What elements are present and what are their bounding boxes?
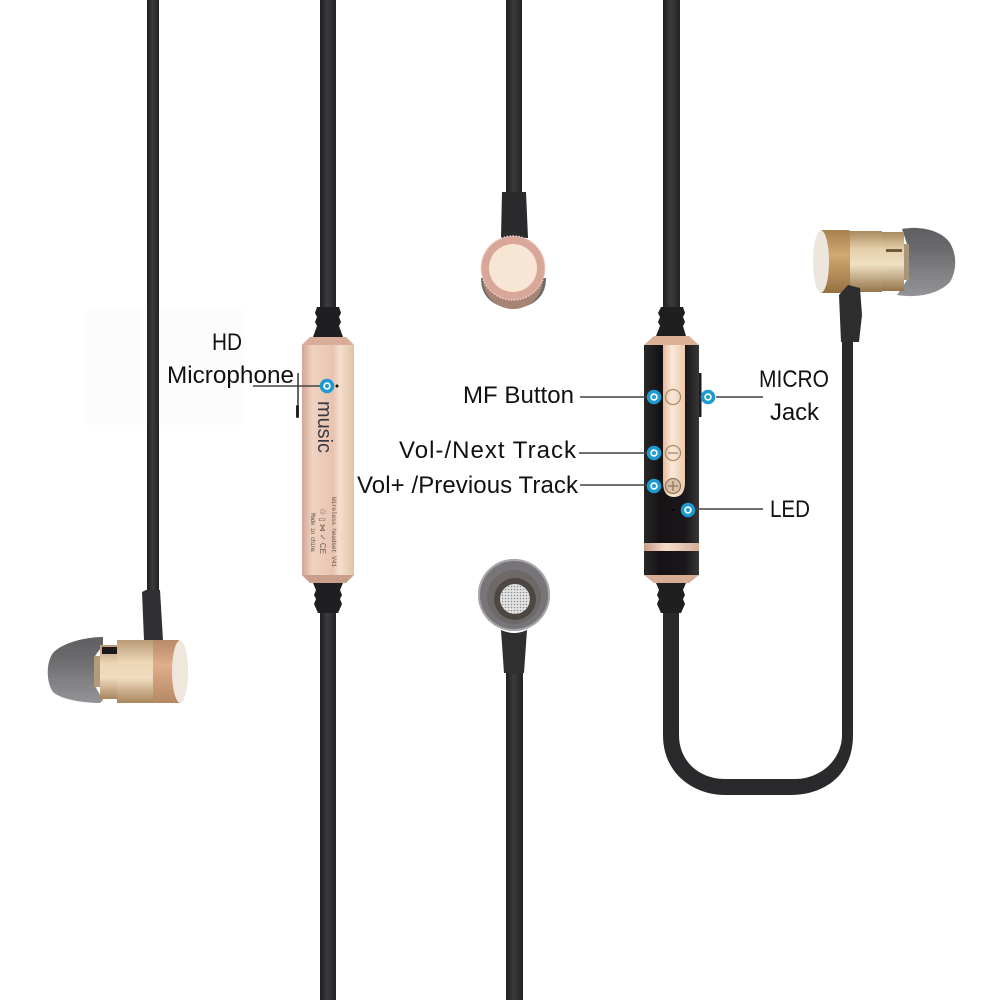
- body: smooth metal: [117, 640, 154, 703]
- callout: Vol-/Next Track: Vol-/Next Track: [399, 437, 577, 464]
- mic hole: [336, 384, 338, 388]
- inner nozzle: [94, 656, 104, 687]
- right cable loop: [663, 340, 853, 795]
- callout: MICRO Jack: Jack: [770, 399, 820, 426]
- body: knurled ring: [153, 640, 180, 703]
- rose caps: [644, 336, 699, 345]
- disc face: [489, 244, 537, 292]
- upper strain relief: [313, 307, 343, 337]
- right earbud: [813, 228, 955, 342]
- collar: [100, 645, 118, 699]
- ear tip: [897, 228, 955, 296]
- lower strain relief: [313, 583, 343, 613]
- LED hole: [672, 509, 674, 511]
- callout: MF Button: [463, 382, 660, 409]
- lower strain relief: [656, 583, 686, 613]
- brand text: music: [313, 401, 335, 453]
- body: face: [172, 640, 188, 702]
- strain relief: [501, 630, 527, 673]
- disc rim: [481, 236, 545, 300]
- leader line: [253, 385, 320, 387]
- collar: [880, 232, 904, 291]
- callout: LED: [682, 496, 810, 523]
- upper strain relief: [656, 307, 686, 336]
- module body: [302, 337, 354, 583]
- label: HD: [212, 329, 242, 356]
- upper cable: [663, 0, 680, 310]
- cable: [506, 673, 523, 1000]
- rear tip: [481, 278, 546, 309]
- body: smooth metal: [849, 231, 882, 292]
- certification marks: ♲ ▯ ⋈ ✓ CE: [318, 508, 327, 554]
- mesh: [500, 584, 530, 614]
- marker: [322, 380, 332, 392]
- body: face: [813, 230, 829, 292]
- cable: [506, 0, 522, 195]
- left cable with module: [296, 0, 354, 1000]
- ear tip: [48, 637, 103, 703]
- rose band: [644, 543, 699, 551]
- collar slot: [886, 249, 902, 252]
- top earbud: [481, 0, 546, 309]
- callout: LED: LED: [770, 496, 810, 523]
- button: MF: [666, 390, 680, 404]
- strain relief: [142, 590, 163, 644]
- right module: [644, 0, 702, 613]
- callout: MICRO Jack: MICRO: [759, 366, 829, 393]
- button: plus: [666, 478, 680, 494]
- body: knurled ring: [821, 230, 850, 293]
- driver ring: [494, 578, 536, 620]
- bottom earbud: [478, 559, 550, 1000]
- left earbud with cable: [48, 0, 188, 703]
- side switch: [297, 373, 299, 416]
- cable: [320, 0, 336, 1000]
- product text: Wireless headset V41: [330, 497, 337, 567]
- callout: HD Microphone: Microphone: [167, 362, 294, 389]
- ear tip: [478, 559, 550, 631]
- micro jack cover: [699, 373, 702, 417]
- strain relief: [501, 192, 528, 238]
- inner nozzle: [900, 244, 909, 280]
- button strip: [663, 345, 685, 497]
- collar slot: [102, 647, 117, 654]
- callout: MF Button: MF Button: [463, 382, 574, 409]
- callout: HD Microphone: [167, 329, 332, 392]
- strain relief: [839, 285, 862, 342]
- callout: MICRO Jack: [702, 366, 829, 426]
- origin text: Made in china: [309, 513, 316, 552]
- faint background patch: [85, 310, 245, 425]
- body: [644, 345, 699, 575]
- button: minus: [666, 446, 680, 460]
- cable: far left: [147, 0, 159, 596]
- callout: Vol+ /Previous Track: Vol+ /Previous Track: [357, 472, 579, 499]
- callout: Vol-/Next Track: [399, 437, 660, 464]
